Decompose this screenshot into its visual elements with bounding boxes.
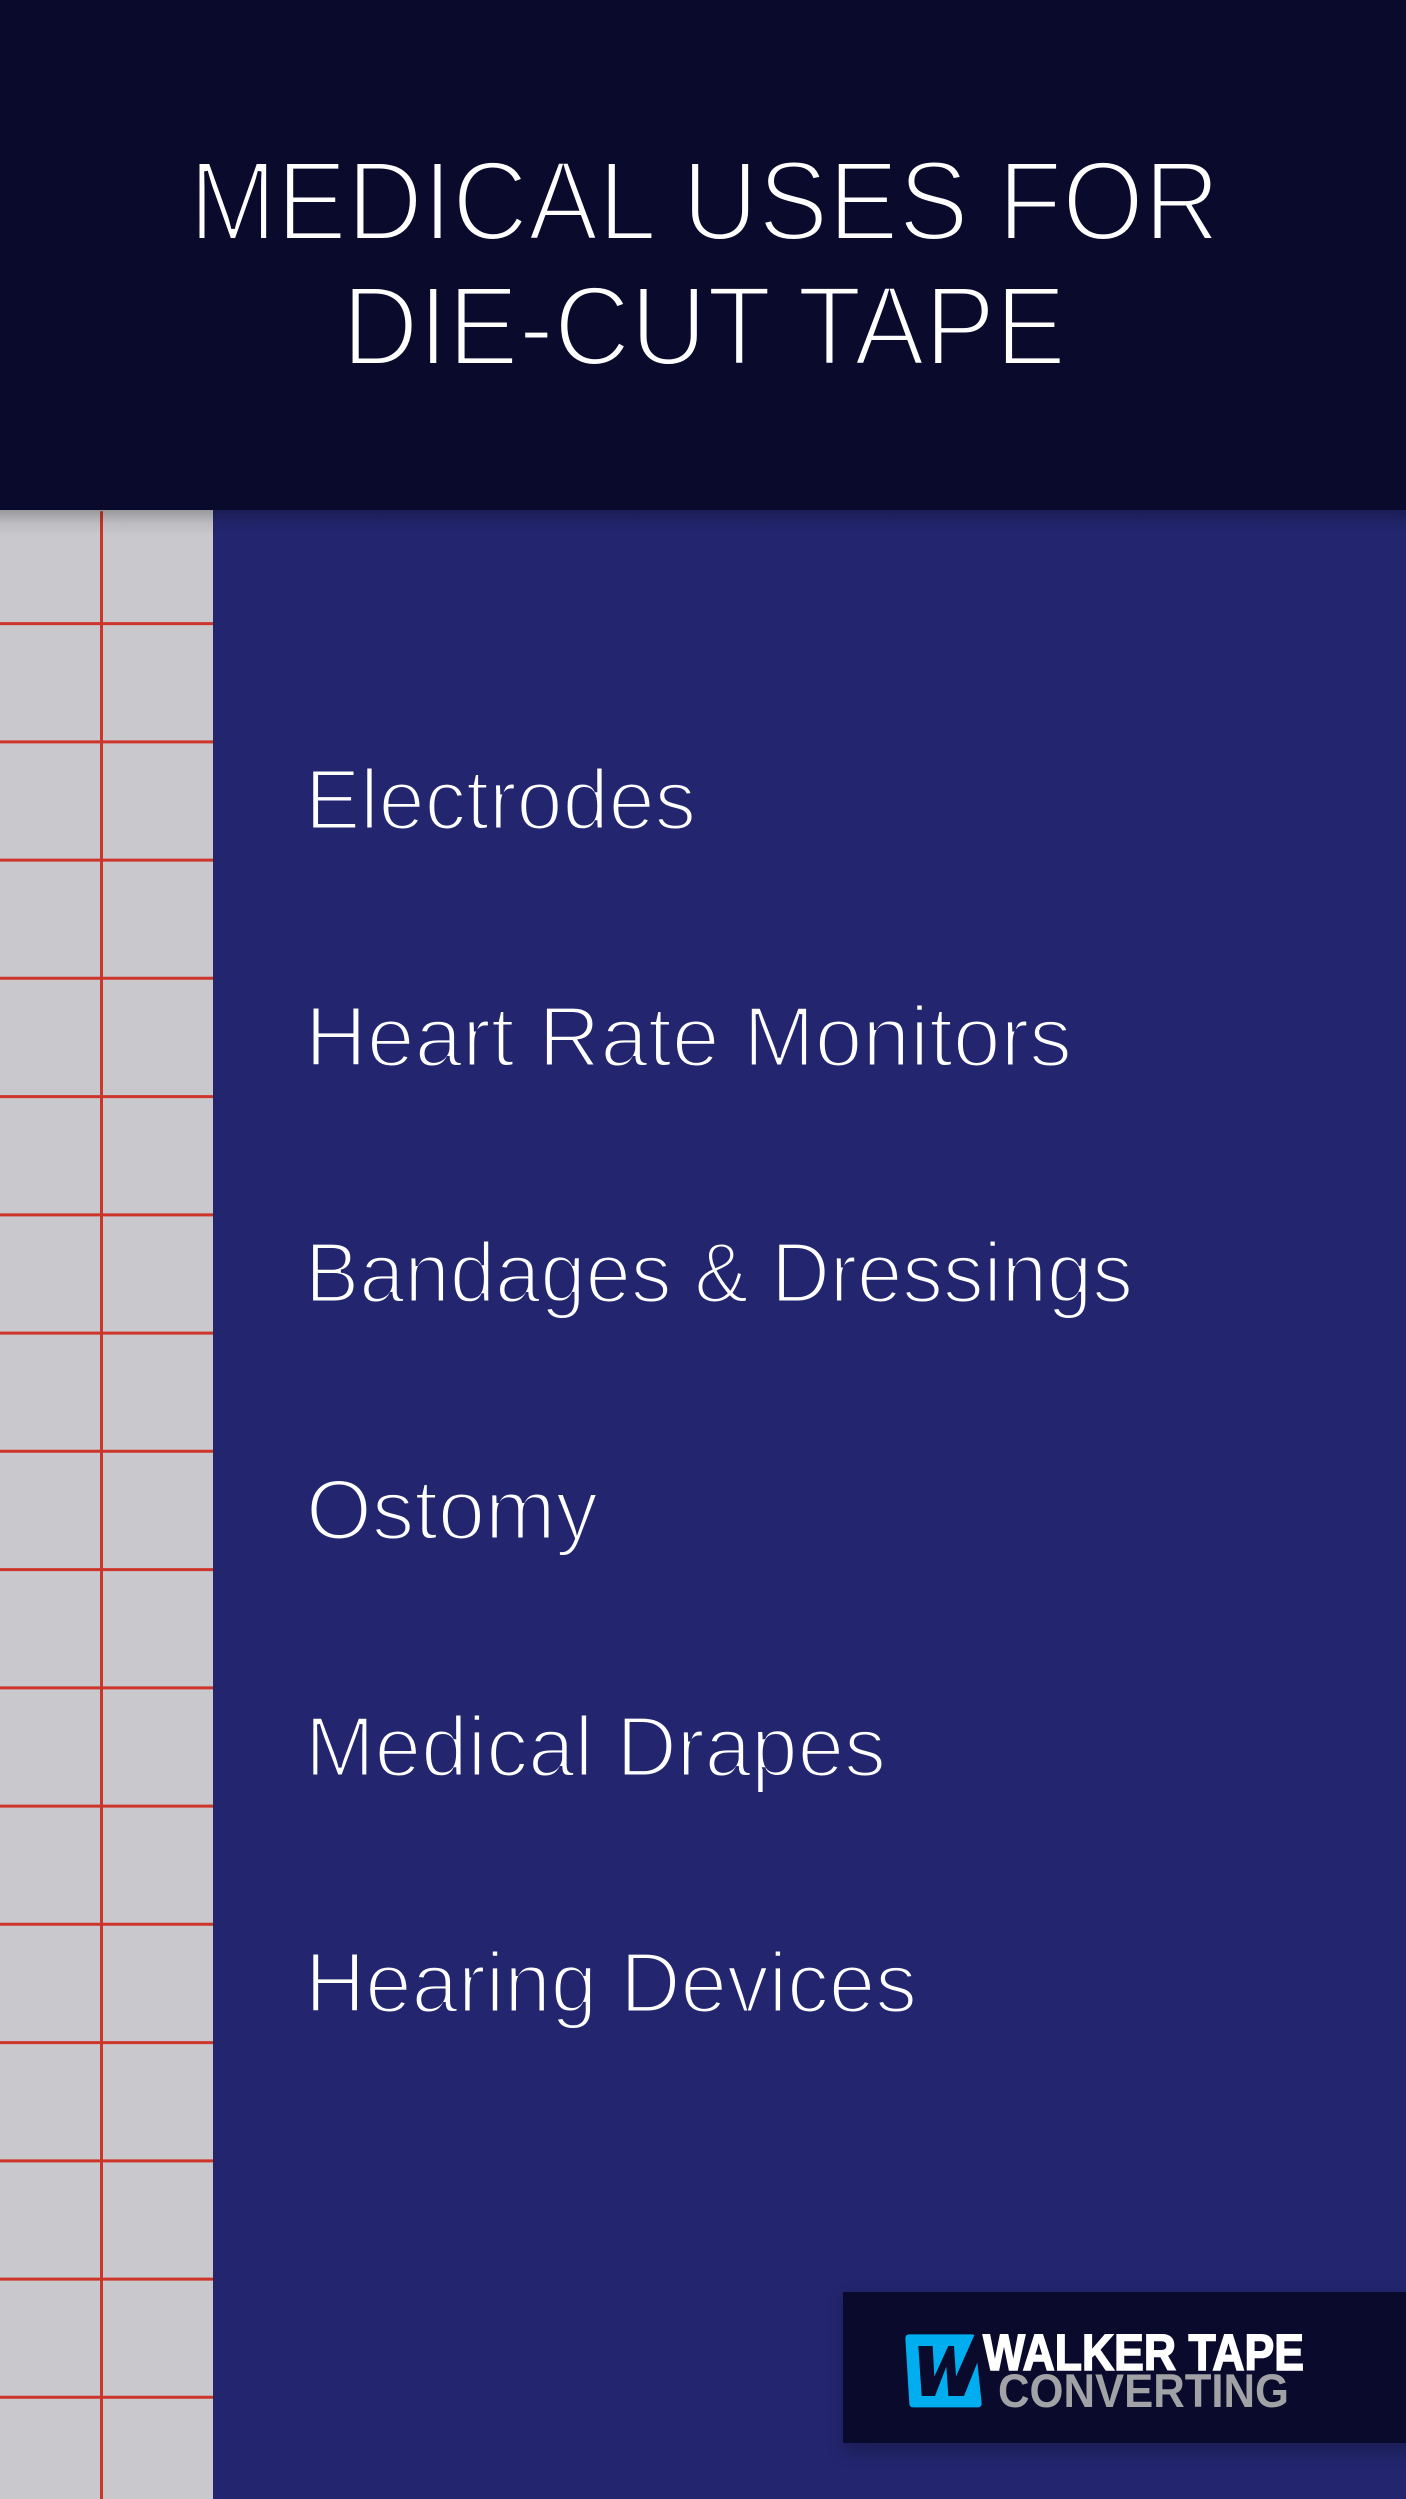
panel: header <box>0 0 1406 510</box>
title: MEDICAL USES FOR <box>189 138 1220 264</box>
logo panel <box>843 2292 1406 2443</box>
list item: heart rate monitors: Heart Rate Monitors <box>305 990 1072 1085</box>
logo wordmark: Converting: CONVERTING <box>998 2364 1289 2417</box>
title <box>189 138 1220 389</box>
logo wordmark: Walker Tape: WALKER TAPE <box>983 2324 1304 2381</box>
panel: list background <box>0 510 1406 2499</box>
icon: Walker Tape W mark <box>905 2334 982 2407</box>
list item: bandages and dressings: Bandages & Dressings <box>305 1226 1133 1321</box>
panel: graph paper strip <box>0 510 213 2499</box>
list item: ostomy: Ostomy <box>306 1463 598 1558</box>
list item: hearing devices: Hearing Devices <box>305 1936 917 2031</box>
list item: medical drapes: Medical Drapes <box>305 1700 886 1795</box>
list item: electrodes: Electrodes <box>305 753 696 848</box>
list of medical uses <box>305 753 1133 2031</box>
title: DIE-CUT TAPE <box>342 263 1066 389</box>
